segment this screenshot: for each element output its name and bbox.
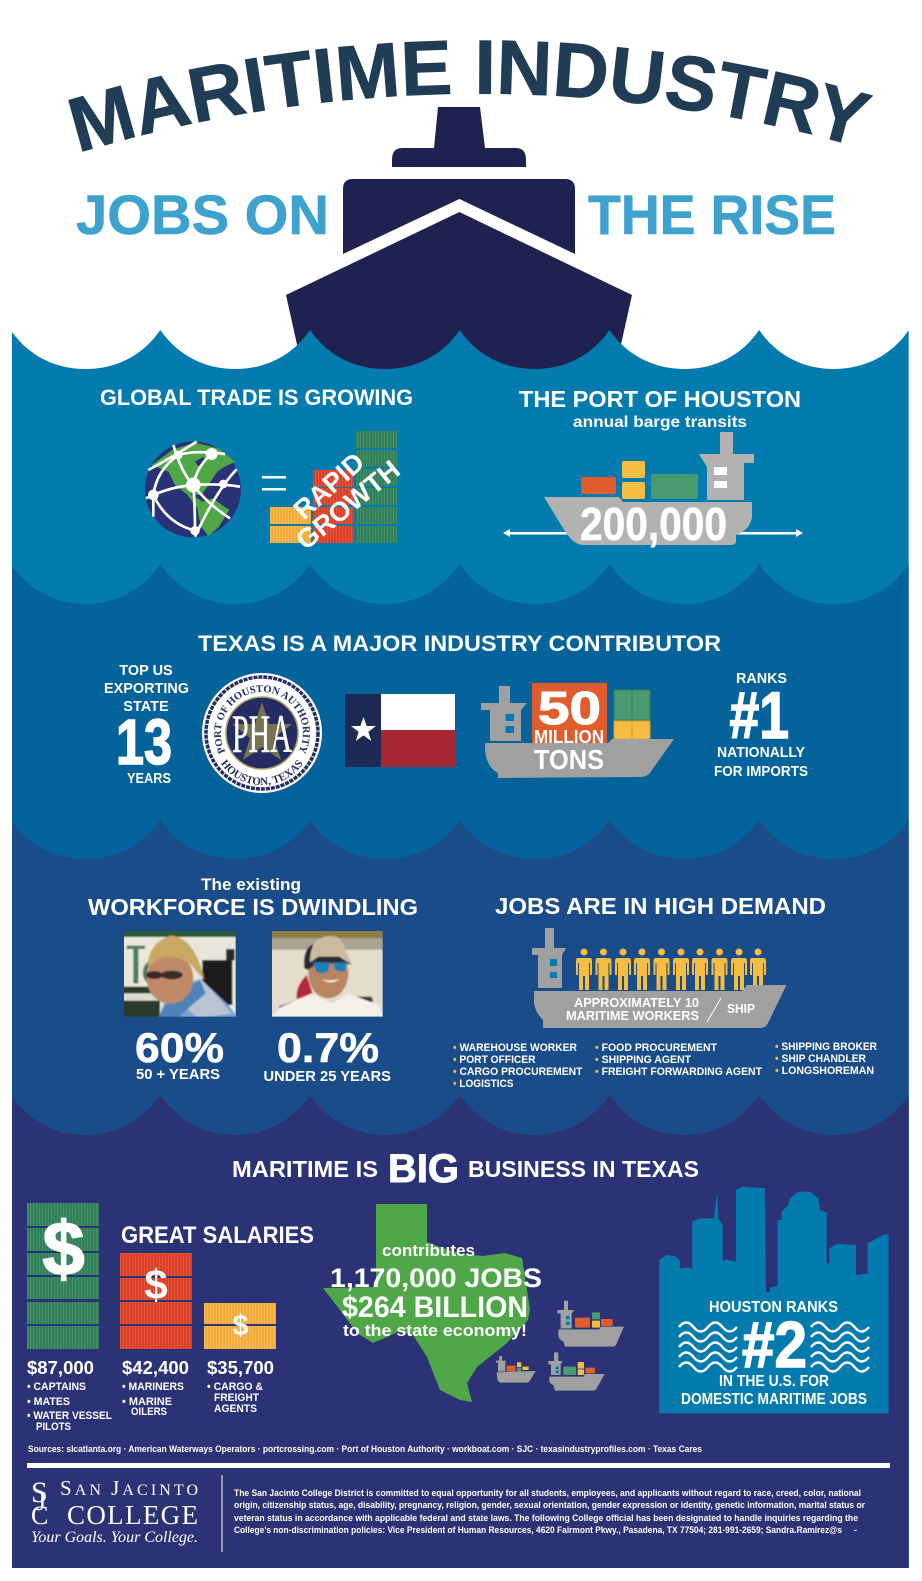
heading: jobs are in high demand: JOBS ARE IN HIGH DEMAND [495,893,826,919]
salary column: mariners: • MARINE [122,1396,172,1408]
text: equal opportunity statement: College’s non-discrimination policies: Vice President of Human Resources, 4620 Fairmont Pkwy., Pasadena, TX 77504; 281-991-2659; Sandra.Ramirez@s [234,1525,842,1535]
heading: maritime is big business in texas [232,1147,699,1191]
label: rapid growth: RAPID [288,447,370,525]
stat: 60% 50+ years: 60% [135,1024,224,1071]
icon: ship with 50 million tons: MILLION [534,727,604,747]
icon: ship with 50 million tons [481,682,674,778]
salary column: cargo agents: AGENTS [214,1403,257,1415]
text: contributes 1,170,000 jobs: 1,170,000 JOBS [330,1263,542,1293]
logo: san jacinto college [31,1476,198,1546]
stat: top exporting state 13 years [104,663,189,787]
panel: texas economy [323,1204,624,1402]
text: equal opportunity statement [234,1488,865,1535]
stat: top exporting state 13 years: EXPORTING [104,681,189,697]
logo: san jacinto college: J [36,1487,46,1516]
panel: port of houston [503,386,803,550]
stat: 0.7% under 25 years: 0.7% [277,1024,379,1071]
icon: ship bow [286,107,632,385]
icon: ship with workers: MARITIME WORKERS [566,1008,699,1023]
stat: ranks #1 nationally for imports: #1 [730,678,789,752]
logo: san jacinto college: Your Goals. Your College. [31,1529,198,1546]
salary column: cargo agents [207,1358,274,1415]
icon: ship with 50 million tons: TONS [534,744,604,775]
stat: ranks #1 nationally for imports: FOR IMPORTS [714,764,808,780]
icon: container stacks [270,431,397,543]
stat: 0.7% under 25 years: UNDER 25 YEARS [264,1069,391,1085]
stat: top exporting state 13 years: YEARS [127,771,171,787]
icon: texas flag [345,694,455,767]
heading: global trade: GLOBAL TRADE IS GROWING [100,385,413,410]
heading: port of houston: THE PORT OF HOUSTON [519,386,801,412]
icon: houston skyline [659,1187,889,1413]
chart: red container stack $42,400: $ [144,1261,168,1308]
text: contributes 1,170,000 jobs [330,1241,542,1340]
heading: maritime is big business in texas: BIG [388,1147,459,1191]
heading: maritime is big business in texas: BUSINESS IN TEXAS [468,1156,699,1182]
subtitle: the rise: THE RISE [588,183,836,246]
salary column: mariners: $42,400 [122,1358,189,1378]
list: maritime jobs column 2: • SHIPPING AGENT [595,1054,691,1066]
text: equal opportunity statement: origin, citizenship status, age, disability, pregnancy, religion, gender, sexual orientation, gender expression or identity, genetic information, marital status or [234,1500,865,1510]
text: in the u.s. for domestic maritime jobs [681,1373,867,1408]
logo: san jacinto college: SAN JACINTO [60,1476,198,1500]
logo: san jacinto college: C [31,1501,48,1530]
icon: right water waves [811,1322,869,1372]
text: contributes 1,170,000 jobs: contributes [382,1241,475,1260]
chart: red container stack $42,400 [120,1253,192,1349]
salary column: cargo agents: $35,700 [207,1358,274,1378]
list: maritime jobs column 2 [595,1042,762,1078]
stat: top exporting state 13 years: 13 [116,706,172,778]
panel: workforce dwindling [88,875,418,1085]
list: maritime jobs column 3 [775,1041,877,1077]
icon: equals sign [262,476,286,490]
icon: ship with workers: APPROXIMATELY 10 [574,995,699,1010]
salary column: captains: • WATER VESSEL [27,1410,112,1422]
stat: 200,000: 200,000 [580,498,727,550]
salary column: mariners [122,1358,189,1418]
list: maritime jobs column 1: • PORT OFFICER [453,1054,536,1066]
text: in the u.s. for domestic maritime jobs: DOMESTIC MARITIME JOBS [681,1391,867,1408]
salary column: captains: $87,000 [27,1358,94,1378]
salary column: mariners: OILERS [131,1406,167,1418]
salary column: captains [27,1358,112,1433]
wave bands background [11,330,909,1570]
label: rapid growth: GROWTH [290,454,406,556]
icon: port of houston authority seal: PHA [232,704,292,764]
title: Maritime Industry: MARITIME INDUSTRY [68,40,874,152]
list: maritime jobs column 2: • FREIGHT FORWARDING AGENT [595,1066,762,1078]
stat: ranks #1 nationally for imports [714,671,808,780]
salary column: captains: PILOTS [36,1421,71,1433]
sources line: Sources: slcatlanta.org · American Waterways Operators · portcrossing.com · Port of Houston Authority · workboat.com · SJC · texasindustryprofiles.com · Texas Cares [28,1444,702,1455]
salary column: captains: • MATES [27,1396,70,1408]
footer divider [27,1463,890,1468]
subheading: annual barge transits: annual barge transits [573,414,747,431]
text: equal opportunity statement: - [854,1525,857,1535]
subtitle: jobs on: JOBS ON [76,183,329,246]
icon: port of houston authority seal: PORT OF HOUSTON AUTHORITY [214,685,310,754]
stat: ranks #1 nationally for imports: NATIONALLY [717,745,805,761]
text: houston ranks: HOUSTON RANKS [709,1299,838,1316]
chart: yellow container stack $35,700 [204,1303,276,1349]
icon: port of houston authority seal: HOUSTON, TEXAS [220,759,302,786]
footer vertical divider [222,1475,223,1552]
heading: texas is a major contributor: TEXAS IS A MAJOR INDUSTRY CONTRIBUTOR [198,631,721,656]
icon: ship with 50 million tons: 50 [538,682,601,734]
icon: globe network [145,441,241,537]
icon: ship with workers: SHIP [727,1001,755,1016]
icon: texas map [323,1204,530,1402]
panel: great salaries [27,1203,314,1433]
list: maritime jobs column 1: • LOGISTICS [453,1078,514,1090]
stat: top exporting state 13 years: STATE [123,699,169,715]
list: maritime jobs column 2: • FOOD PROCUREMENT [595,1042,717,1054]
salary column: cargo agents: FREIGHT [214,1392,259,1404]
icon: ship with workers [532,928,786,1028]
photo: older male mariner [122,928,238,1018]
photo: young female mariner [268,928,385,1018]
heading: maritime is big business in texas: MARITIME IS [232,1156,378,1182]
heading: great salaries: GREAT SALARIES [121,1222,314,1249]
chart: green container stack $87,000: $ [42,1207,85,1292]
text: equal opportunity statement: The San Jacinto College District is committed to equal opportunity for all students, employees, and applicants without regard to race, creed, color, national [234,1488,861,1498]
panel: houston ranks #2 [659,1187,889,1413]
stat: ranks #1 nationally for imports: RANKS [736,671,787,687]
text: contributes 1,170,000 jobs: $264 BILLION [342,1291,528,1324]
salary column: mariners: • MARINERS [122,1381,184,1393]
heading: workforce is dwindling: WORKFORCE IS DWINDLING [88,894,418,920]
panel: texas contributor [104,631,808,793]
chart: yellow container stack $35,700: $ [232,1310,249,1342]
salary column: captains: • CAPTAINS [27,1381,86,1393]
subheading: the existing: The existing [201,875,301,894]
stat: 0.7% under 25 years [264,1024,391,1085]
icon: left water waves [679,1322,737,1372]
panel: global trade [100,385,413,556]
salary column: cargo agents: • CARGO & [207,1381,263,1393]
list: maritime jobs column 1: • CARGO PROCUREMENT [453,1066,583,1078]
list: maritime jobs column 1: • WAREHOUSE WORKER [453,1042,577,1054]
stat: #2: #2 [742,1308,807,1381]
text: contributes 1,170,000 jobs: to the state economy! [343,1321,527,1340]
list: maritime jobs column 3: • LONGSHOREMAN [775,1065,874,1077]
panel: jobs in high demand [453,893,877,1090]
arrow: left and right [503,529,803,537]
list: maritime jobs column 1 [453,1042,583,1090]
text: equal opportunity statement: veteran status in accordance with applicable federal and state laws. The following College official has been designated to handle inquiries regarding the [234,1513,858,1523]
icon: three small ships [496,1301,624,1391]
logo: san jacinto college: COLLEGE [67,1500,198,1530]
icon: port of houston authority seal [202,673,322,793]
text: in the u.s. for domestic maritime jobs: IN THE U.S. FOR [719,1373,829,1390]
chart: green container stack $87,000 [27,1203,99,1349]
stat: 60% 50+ years: 50 + YEARS [136,1067,220,1083]
icon: cargo ship [544,432,754,545]
list: maritime jobs column 3: • SHIPPING BROKER [775,1041,877,1053]
logo: san jacinto college: S [31,1476,48,1509]
stat: top exporting state 13 years: TOP US [119,663,173,679]
list: maritime jobs column 3: • SHIP CHANDLER [775,1053,866,1065]
